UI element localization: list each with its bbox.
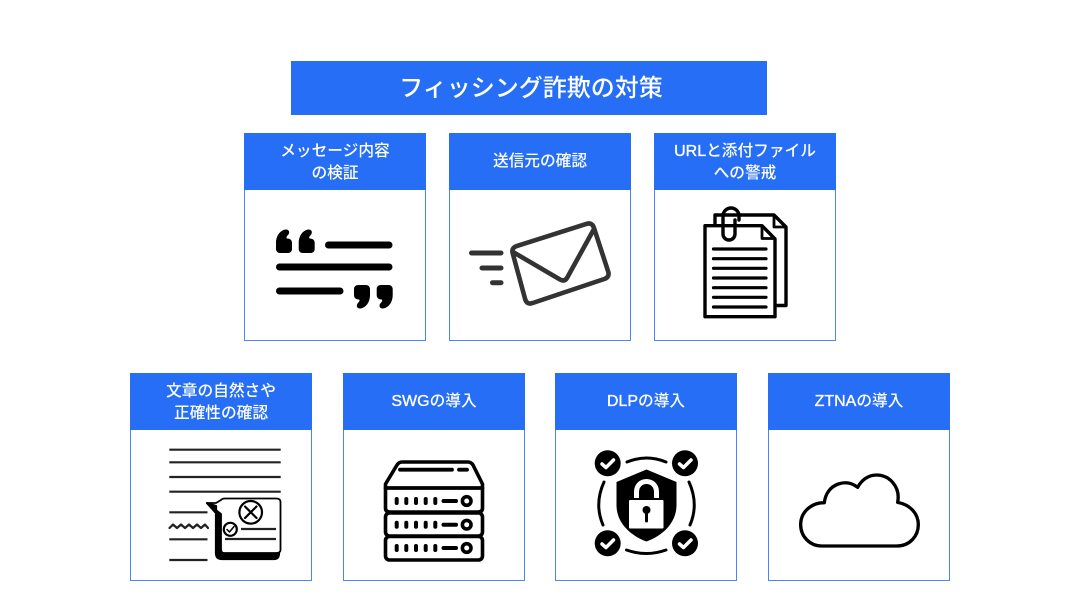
heading: DLP — [555, 373, 737, 430]
heading: natural and accurate text: 文章の自然さや — [166, 382, 276, 400]
panel: ZTNA — [768, 373, 950, 581]
icon: clipped documents — [705, 208, 786, 317]
heading: DLP: DLPの導入 — [607, 392, 685, 410]
icon: security shield with padlock — [595, 450, 698, 556]
heading: SWG — [343, 373, 525, 430]
icon: quotation text — [276, 230, 393, 308]
heading: message verification — [244, 133, 426, 190]
heading: URL and attachments: URLと添付ファイル — [674, 142, 816, 160]
heading: sender confirmation — [449, 133, 631, 190]
heading: ZTNA: ZTNAの導入 — [815, 392, 903, 410]
panel: DLP — [555, 373, 737, 581]
heading: ZTNA — [768, 373, 950, 430]
heading: SWG: SWGの導入 — [391, 392, 477, 410]
panel: natural and accurate text — [130, 373, 312, 581]
heading: URL and attachments: への警戒 — [714, 164, 776, 182]
icon: cloud — [801, 475, 918, 546]
panel: sender confirmation — [449, 133, 631, 341]
title — [291, 61, 767, 115]
heading: URL and attachments — [654, 133, 836, 190]
heading: natural and accurate text: 正確性の確認 — [174, 404, 268, 422]
panel: message verification — [244, 133, 426, 341]
heading: sender confirmation: 送信元の確認 — [493, 152, 587, 170]
heading: natural and accurate text — [130, 373, 312, 430]
title: フィッシング詐欺の対策 — [399, 75, 663, 102]
heading: message verification: の検証 — [311, 164, 359, 182]
panel: URL and attachments — [654, 133, 836, 341]
heading: message verification: メッセージ内容 — [280, 142, 390, 160]
panel: SWG — [343, 373, 525, 581]
icon: server stack — [386, 462, 482, 560]
icon: text review with speech bubble — [169, 450, 281, 560]
icon: flying envelope — [472, 223, 609, 304]
